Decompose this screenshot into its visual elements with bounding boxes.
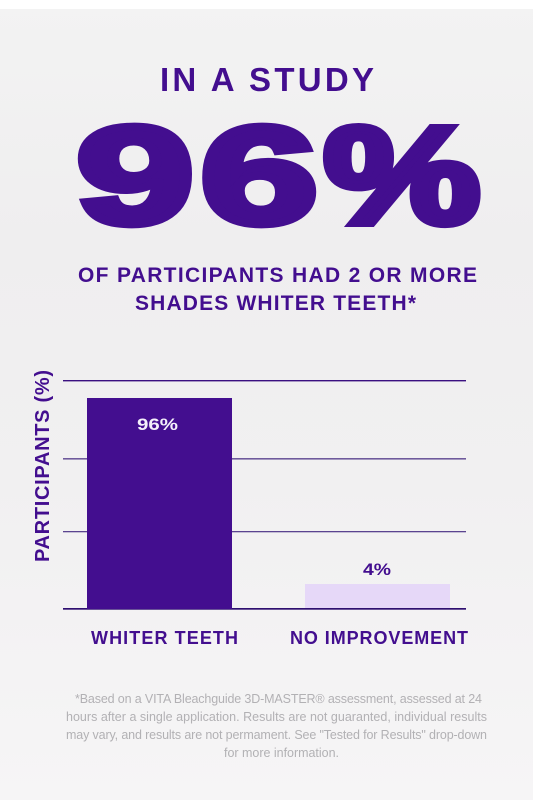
footnote: may vary, and results are not permament. See "Tested for Results" drop-down <box>66 728 487 742</box>
bar: no improvement <box>305 584 450 608</box>
footnote <box>66 692 487 760</box>
bar: whiter teeth <box>87 398 232 609</box>
heading: in a study: IN A STUDY <box>160 61 374 98</box>
top white band <box>0 0 533 9</box>
value: 4%: 4% <box>363 560 391 579</box>
category: no improvement: NO IMPROVEMENT <box>290 628 468 648</box>
footnote: hours after a single application. Results are not guaranted, individual results <box>66 710 487 724</box>
footnote: *Based on a VITA Bleachguide 3D-MASTER® assessment, assessed at 24 <box>75 692 482 706</box>
big number: 96% <box>77 98 480 253</box>
category: whiter teeth: WHITER TEETH <box>91 628 238 648</box>
big number: 96%: % <box>324 98 480 253</box>
big number: 96%: 9 <box>77 98 194 252</box>
footnote: for more information. <box>224 746 339 760</box>
big number: 96%: 6 <box>201 98 318 252</box>
subheading: OF PARTICIPANTS HAD 2 OR MORE <box>78 264 477 287</box>
subheading <box>78 264 477 315</box>
y axis label: PARTICIPANTS (%) <box>32 370 54 562</box>
value: 96%: 96% <box>137 415 178 434</box>
bar chart <box>63 380 468 648</box>
subheading: SHADES WHITER TEETH* <box>135 292 417 315</box>
